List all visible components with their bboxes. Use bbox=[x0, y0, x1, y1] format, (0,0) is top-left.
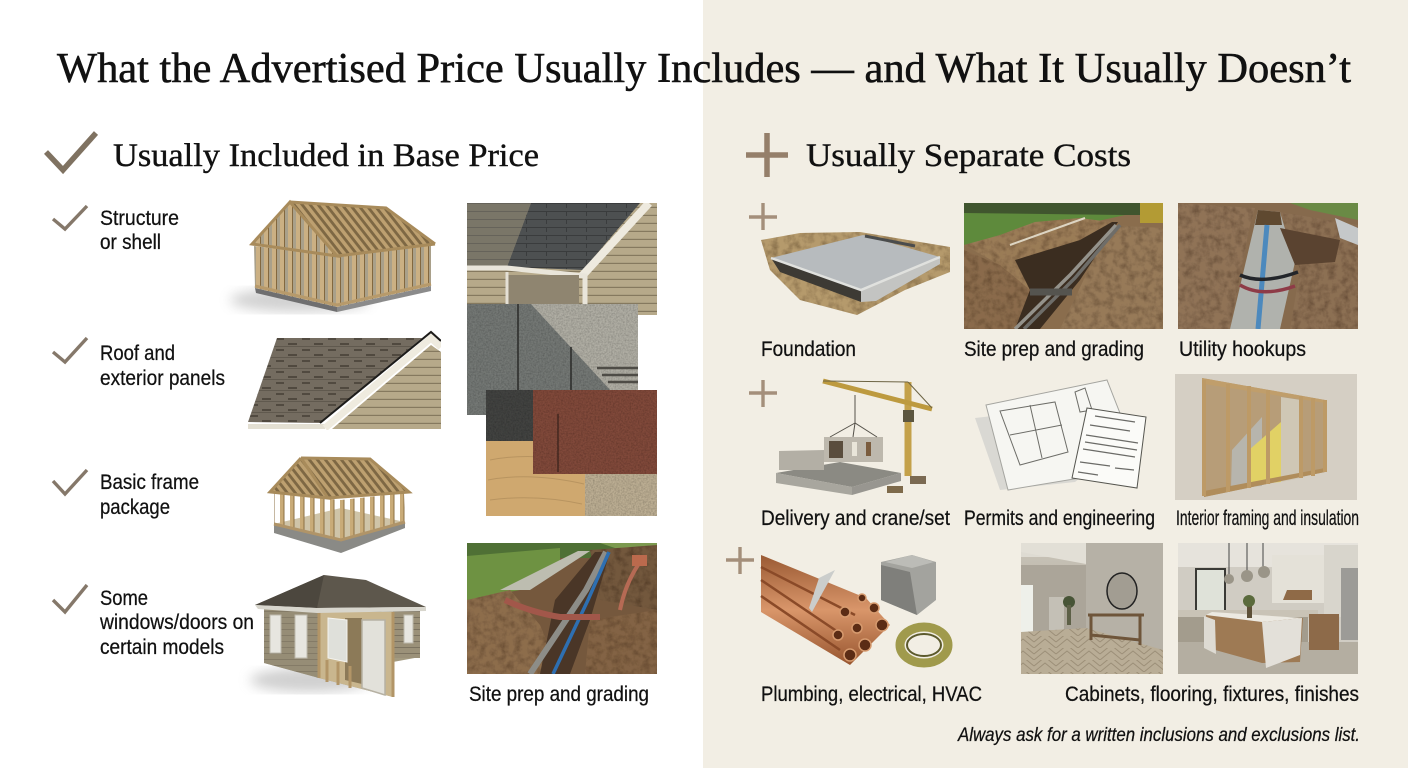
icon: plus row two bbox=[749, 380, 777, 407]
label: structure or shell bbox=[100, 207, 179, 254]
panel: usually separate costs bbox=[726, 133, 1360, 746]
icon: plus row three bbox=[726, 547, 754, 574]
title: What the Advertised Price Usually Includes — and What It Usually Doesn’t bbox=[57, 46, 1351, 92]
illustration: shingle roof and siding bbox=[248, 332, 441, 429]
label: delivery and crane/set: Delivery and crane/set bbox=[761, 507, 950, 530]
label: some windows/doors on certain models: windows/doors on bbox=[99, 611, 254, 634]
photo: finished kitchen bbox=[1176, 543, 1358, 674]
note: written inclusions list: Always ask for a written inclusions and exclusions list. bbox=[957, 725, 1360, 746]
illustration: basic frame package bbox=[270, 458, 409, 553]
label: some windows/doors on certain models: Some bbox=[100, 587, 148, 610]
label: basic frame package: Basic frame bbox=[100, 471, 199, 494]
illustration: crane setting a module bbox=[776, 381, 932, 495]
label: structure or shell: Structure bbox=[100, 207, 179, 230]
illustration: interior wall framing and insulation bbox=[1175, 374, 1357, 500]
label: cabinets, flooring, fixtures, finishes: Cabinets, flooring, fixtures, finishes bbox=[1065, 683, 1359, 706]
photo: utility hookups trench bbox=[1178, 203, 1358, 329]
label: basic frame package: package bbox=[100, 496, 170, 519]
icon: check windows bbox=[53, 585, 87, 612]
photo: site prep trench bbox=[467, 543, 657, 674]
label: permits and engineering: Permits and engineering bbox=[964, 507, 1155, 530]
heading: usually included: Usually Included in Base Price bbox=[113, 138, 539, 174]
illustration: permit and engineering documents bbox=[975, 380, 1146, 490]
photo: finished interior with mirror bbox=[1021, 543, 1163, 674]
label: roof and exterior panels: Roof and bbox=[100, 342, 175, 365]
icon: check roof bbox=[53, 338, 87, 362]
label: roof and exterior panels: exterior panels bbox=[100, 367, 225, 390]
label: plumbing, electrical, HVAC: Plumbing, electrical, HVAC bbox=[761, 683, 982, 706]
label: roof and exterior panels bbox=[100, 342, 225, 390]
label: foundation: Foundation bbox=[761, 338, 856, 361]
illustration: house with windows and doors bbox=[250, 575, 426, 697]
icon: large check mark bbox=[46, 133, 96, 170]
label: site prep and grading: Site prep and grading bbox=[964, 338, 1144, 361]
illustration: concrete foundation slab bbox=[761, 232, 950, 315]
icon: plus row one bbox=[749, 203, 777, 230]
label: utility hookups: Utility hookups bbox=[1179, 338, 1306, 361]
illustration: copper pipes, AC unit and wire bbox=[761, 555, 948, 665]
label: some windows/doors on certain models: certain models bbox=[100, 636, 224, 659]
label: basic frame package bbox=[100, 471, 199, 519]
icon: check structure bbox=[53, 206, 87, 229]
label: some windows/doors on certain models bbox=[99, 587, 254, 659]
photo: site prep and grading bbox=[964, 203, 1163, 329]
label: structure or shell: or shell bbox=[100, 231, 161, 254]
photo: roof and siding closeup bbox=[467, 203, 657, 315]
panel: usually included in base price bbox=[46, 133, 657, 706]
illustration: wood frame shell bbox=[230, 202, 435, 312]
photo: roofing and siding swatches bbox=[486, 390, 657, 516]
label: site prep and grading (included): Site prep and grading bbox=[469, 683, 649, 706]
icon: large plus bbox=[746, 133, 788, 177]
heading: usually separate costs: Usually Separate Costs bbox=[806, 138, 1131, 174]
photo: exterior panel samples bbox=[467, 304, 638, 415]
icon: check frame bbox=[53, 470, 87, 494]
